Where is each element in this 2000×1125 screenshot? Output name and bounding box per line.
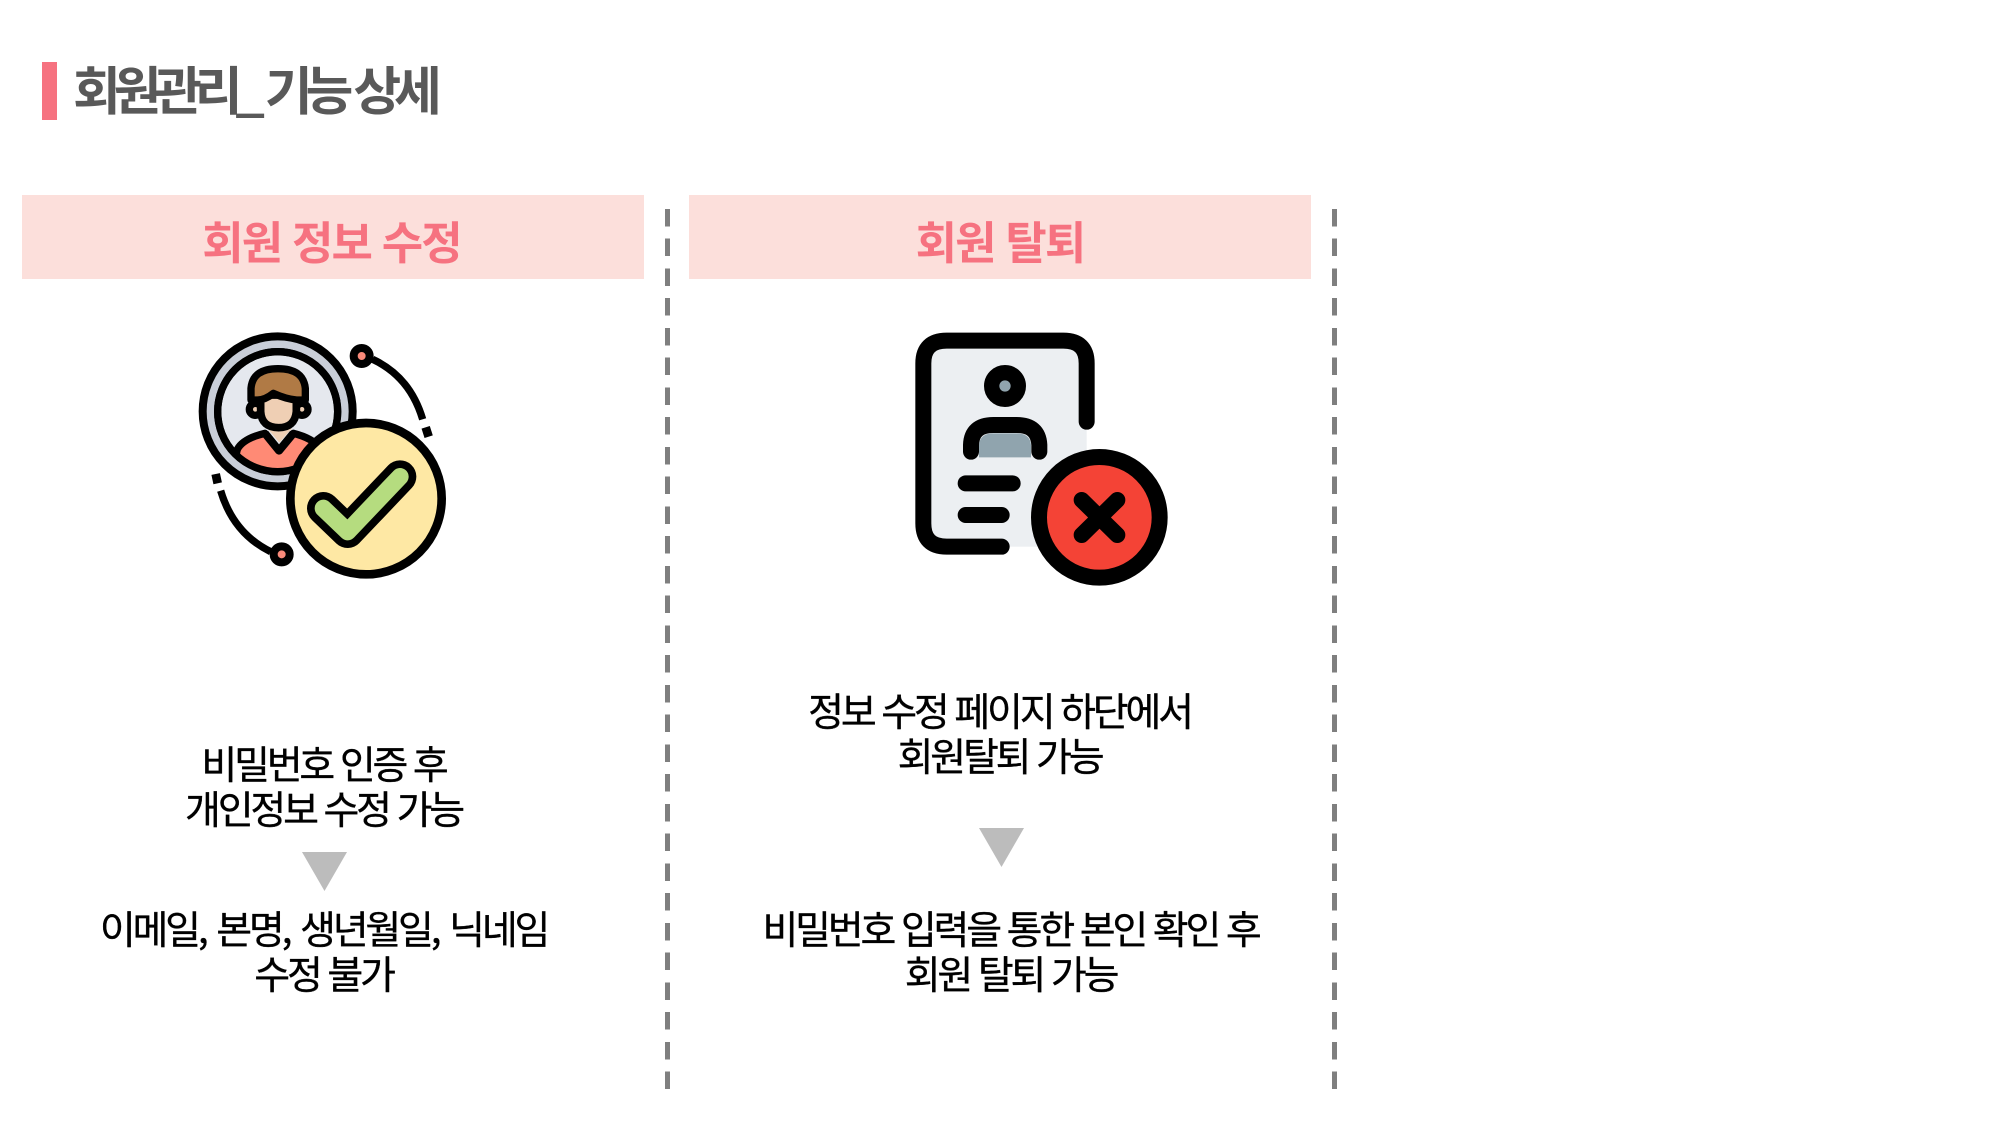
text: password verification bbox=[185, 735, 464, 836]
icon: profile document with X mark bbox=[915, 332, 1168, 586]
text: password verification: 비밀번호 인증 후 bbox=[201, 735, 446, 791]
divider: left dashed line bbox=[665, 209, 670, 1090]
panel: 회원 정보 수정 bbox=[22, 195, 644, 1001]
icon: profile with check mark bbox=[198, 332, 446, 579]
arrow: down triangle bbox=[302, 852, 347, 891]
heading: 회원 탈퇴 bbox=[689, 195, 1311, 279]
title accent bar bbox=[42, 62, 57, 120]
arrow: down triangle bbox=[979, 828, 1024, 867]
text: fields not editable: 이메일, 본명, 생년월일, 닉네임 bbox=[100, 900, 547, 956]
text: withdrawal location: 정보 수정 페이지 하단에서 bbox=[808, 682, 1191, 738]
heading: 회원 정보 수정: 회원 정보 수정 bbox=[202, 207, 461, 272]
text: password confirmation: 비밀번호 입력을 통한 본인 확인 후 bbox=[762, 900, 1259, 956]
heading: 회원 정보 수정 bbox=[22, 195, 644, 279]
text: fields not editable bbox=[100, 900, 547, 1001]
panel: 회원 탈퇴 bbox=[689, 195, 1311, 1001]
text: fields not editable: 수정 불가 bbox=[254, 945, 393, 1001]
text: withdrawal location bbox=[808, 682, 1191, 783]
text: password verification: 개인정보 수정 가능 bbox=[185, 780, 462, 836]
text: password confirmation bbox=[762, 900, 1260, 1001]
text: password confirmation: 회원 탈퇴 가능 bbox=[905, 945, 1116, 1001]
heading: 회원 탈퇴: 회원 탈퇴 bbox=[916, 207, 1084, 272]
title: 회원관리_ 기능 상세 bbox=[73, 50, 435, 125]
text: withdrawal location: 회원탈퇴 가능 bbox=[898, 727, 1101, 783]
divider: right dashed line bbox=[1332, 209, 1337, 1090]
